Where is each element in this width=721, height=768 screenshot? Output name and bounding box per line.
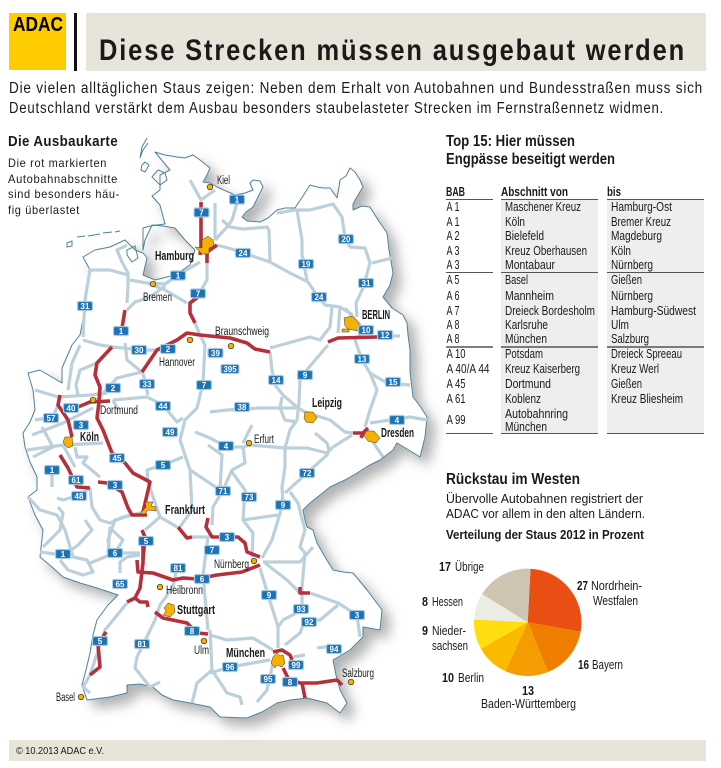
table: top 15 bottlenecks: Salzburg <box>611 331 649 346</box>
motorway number badges <box>44 195 404 687</box>
table: top 15 bottlenecks: Kreuz Bliesheim <box>611 391 683 406</box>
pie labels: Hessen <box>432 594 463 609</box>
motorway number badges: 12 <box>381 331 390 340</box>
motorway number badges: 31 <box>81 302 90 311</box>
table: top 15 bottlenecks: Potsdam <box>505 346 543 361</box>
motorway number badges: 10 <box>362 326 371 335</box>
pie labels: Berlin <box>458 670 484 685</box>
table: top 15 bottlenecks: bis <box>607 184 621 199</box>
motorway number badges: 4 <box>395 416 400 425</box>
pie labels: 16 <box>578 657 589 672</box>
table: top 15 bottlenecks: Montabaur <box>505 257 556 272</box>
motorway number badges: 7 <box>202 381 207 390</box>
table: top 15 bottlenecks: Mannheim <box>505 288 554 303</box>
motorway number badges: 3 <box>355 611 360 620</box>
table: top 15 bottlenecks: Ulm <box>611 317 629 332</box>
table: top 15 bottlenecks: Nürnberg <box>611 257 653 272</box>
motorway number badges: 39 <box>211 349 220 358</box>
table: top 15 bottlenecks: Maschener Kreuz <box>505 199 581 214</box>
motorway number badges: 1 <box>235 196 240 204</box>
table: top 15 bottlenecks: A 3 <box>446 257 460 272</box>
pie labels: 17 <box>439 559 451 574</box>
motorway number badges: 45 <box>113 454 122 463</box>
pie labels: Nieder- <box>432 623 466 638</box>
city labels: Nürnberg <box>214 559 249 571</box>
motorway number badges: 3 <box>79 421 84 430</box>
city labels: Leipzig <box>312 396 342 410</box>
motorway number badges: 20 <box>342 235 351 244</box>
map heading and description: fig überlastet <box>8 203 80 217</box>
intro text <box>9 80 703 117</box>
motorway number badges: 3 <box>113 481 118 490</box>
table: top 15 bottlenecks: A 61 <box>446 391 466 406</box>
city markers <box>78 184 354 700</box>
motorway number badges: 4 <box>224 442 229 451</box>
table: top 15 bottlenecks: Hamburg-Südwest <box>611 303 696 318</box>
table: top 15 bottlenecks: Hamburg-Ost <box>611 199 672 214</box>
motorway number badges: 73 <box>245 493 254 502</box>
table: top 15 bottlenecks: Karlsruhe <box>505 317 548 332</box>
table: top 15 bottlenecks: Bremer Kreuz <box>611 214 671 229</box>
table: top 15 bottlenecks: Autobahnring <box>505 406 568 421</box>
motorway number badges: 395 <box>223 365 237 374</box>
motorway number badges: 24 <box>315 293 324 302</box>
metropolitan areas <box>63 236 380 668</box>
table: top 15 bottlenecks: Nürnberg <box>611 288 653 303</box>
motorway number badges: 6 <box>113 549 118 558</box>
city labels: Bremen <box>143 292 172 304</box>
pie labels: Nordrhein- <box>591 578 642 593</box>
motorway number badges: 33 <box>143 380 152 389</box>
city labels: Basel <box>56 692 75 704</box>
table: top 15 bottlenecks: Köln <box>611 243 631 258</box>
motorway number badges: 2 <box>166 345 171 354</box>
heading and text: Rückstau im Westen: ADAC vor allem in den alten Ländern. <box>446 506 645 521</box>
motorway number badges: 9 <box>267 591 272 600</box>
city labels: Ulm <box>194 645 209 657</box>
city labels: München <box>226 646 265 660</box>
motorway number badges: 57 <box>47 414 56 423</box>
motorway number badges: 31 <box>362 279 371 288</box>
heading and text: Rückstau im Westen: Verteilung der Staus 2012 in Prozent <box>446 527 645 542</box>
islands <box>67 138 167 262</box>
motorway number badges: 72 <box>303 469 312 478</box>
table: top 15 bottlenecks: A 10 <box>446 346 466 361</box>
motorway number badges: 15 <box>389 378 398 387</box>
pie labels: Übrige <box>455 559 484 574</box>
table: top 15 bottlenecks: Kreuz Werl <box>611 361 659 376</box>
table: top 15 bottlenecks: A 3 <box>446 243 460 258</box>
table: top 15 bottlenecks: A 7 <box>446 303 460 318</box>
table: top 15 bottlenecks: A 45 <box>446 376 466 391</box>
motorway number badges: 49 <box>166 428 175 437</box>
map heading and description: Die Ausbaukarte <box>8 134 118 150</box>
table: top 15 bottlenecks: A 99 <box>446 412 466 427</box>
table: top 15 bottlenecks: A 2 <box>446 228 460 243</box>
motorway number badges: 7 <box>210 546 215 555</box>
city labels: Kiel <box>217 175 230 187</box>
motorway number badges: 5 <box>144 537 149 546</box>
header divider bar <box>74 13 77 71</box>
table: top 15 bottlenecks: Gießen <box>611 272 642 287</box>
pie labels: sachsen <box>432 638 468 653</box>
motorway number badges: 2 <box>111 384 116 393</box>
motorway number badges: 6 <box>200 575 205 584</box>
city labels: Köln <box>80 430 99 444</box>
table: top 15 bottlenecks: A 8 <box>446 317 460 332</box>
city labels: Hamburg <box>155 249 194 263</box>
motorway number badges: 92 <box>305 618 314 627</box>
motorway number badges: 96 <box>226 663 235 672</box>
pie labels: 27 <box>577 578 588 593</box>
map heading and description <box>8 134 120 217</box>
table: top 15 bottlenecks: Dreieck Bordesholm <box>505 303 595 318</box>
panel: Germany motorway map <box>23 138 427 718</box>
pie labels <box>422 559 642 711</box>
city labels: Dresden <box>381 426 414 440</box>
motorway number badges: 65 <box>116 580 125 589</box>
map heading and description: sind besonders häu- <box>8 187 120 201</box>
table: top 15 bottlenecks: Magdeburg <box>611 228 662 243</box>
motorway number badges: 1 <box>176 272 181 280</box>
motorway number badges: 8 <box>288 678 293 687</box>
table: top 15 bottlenecks <box>446 184 704 434</box>
city labels: Heilbronn <box>166 585 203 597</box>
city labels <box>56 175 414 704</box>
city labels: Braunschweig <box>215 326 269 338</box>
motorway number badges: 1 <box>50 466 55 475</box>
table: top 15 bottlenecks: München <box>505 331 547 346</box>
pie labels: 13 <box>522 683 534 698</box>
motorway number badges: 38 <box>238 403 247 412</box>
motorway number badges: 7 <box>199 208 204 218</box>
motorway number badges: 24 <box>239 249 248 258</box>
footer bar: © 10.2013 ADAC e.V. <box>16 745 104 757</box>
table: top 15 bottlenecks: Dreieck Spreeau <box>611 346 682 361</box>
motorway number badges: 48 <box>75 492 84 501</box>
city labels: Salzburg <box>342 668 374 680</box>
table: top 15 bottlenecks: A 40/A 44 <box>446 361 490 376</box>
table: top 15 bottlenecks: Köln <box>505 214 525 229</box>
motorway number badges: 14 <box>272 376 281 385</box>
pie labels: 9 <box>422 623 428 638</box>
table: top 15 bottlenecks: München <box>505 419 547 434</box>
city labels: Frankfurt <box>165 503 206 517</box>
city labels: Stuttgart <box>177 603 216 617</box>
motorway number badges: 61 <box>72 476 81 485</box>
motorway number badges: 3 <box>225 533 230 542</box>
heading and text: Rückstau im Westen <box>446 471 645 542</box>
table heading: Top 15: Hier müssen <box>446 133 575 150</box>
motorway number badges: 93 <box>297 605 306 614</box>
heading and text: Rückstau im Westen: Rückstau im Westen <box>446 471 580 488</box>
city labels: Dortmund <box>100 405 138 417</box>
pie chart: congestion by state <box>422 559 642 711</box>
heading and text: Rückstau im Westen: Übervolle Autobahnen registriert der <box>446 491 644 506</box>
pie labels: Westfalen <box>593 593 638 608</box>
table: top 15 bottlenecks: Gießen <box>611 376 642 391</box>
map heading and description: Die rot markierten <box>8 156 107 170</box>
pie labels: 10 <box>442 670 454 685</box>
city labels: BERLIN <box>362 308 390 322</box>
congested sections (red) <box>58 202 377 698</box>
table: top 15 bottlenecks: Basel <box>505 272 528 287</box>
motorway number badges: 95 <box>264 675 273 684</box>
table: top 15 bottlenecks: A 1 <box>446 214 460 229</box>
motorway number badges: 71 <box>219 487 228 496</box>
motorway number badges: 30 <box>135 346 144 355</box>
table: top 15 bottlenecks: Bielefeld <box>505 228 544 243</box>
header: ADAC logo <box>9 13 66 70</box>
motorway number badges: 81 <box>138 640 147 649</box>
motorway number badges: 8 <box>190 627 195 636</box>
title banner <box>86 13 706 71</box>
motorway number badges: 1 <box>119 327 124 336</box>
motorway number badges: 9 <box>303 371 308 380</box>
pie labels: Bayern <box>592 657 623 672</box>
city labels: Erfurt <box>254 434 275 446</box>
motorway number badges: 1 <box>61 550 66 559</box>
header: ADAC logo: ADAC <box>13 14 63 36</box>
map heading and description: Autobahnabschnitte <box>8 172 118 186</box>
motorway number badges: 7 <box>196 290 201 298</box>
table: top 15 bottlenecks: A 1 <box>446 199 460 214</box>
motorway number badges: 19 <box>302 260 311 269</box>
footer bar <box>9 740 706 761</box>
motorway number badges: 81 <box>174 564 183 573</box>
table: top 15 bottlenecks: Abschnitt von <box>501 184 568 199</box>
table: top 15 bottlenecks: Kreuz Oberhausen <box>505 243 587 258</box>
motorway number badges: 94 <box>330 645 339 654</box>
table: top 15 bottlenecks: Kreuz Kaiserberg <box>505 361 580 376</box>
table heading: Engpässe beseitigt werden <box>446 151 615 168</box>
table heading <box>446 133 615 168</box>
table: top 15 bottlenecks: A 5 <box>446 272 460 287</box>
land outline <box>23 152 427 718</box>
city labels: Hannover <box>159 357 195 369</box>
table: top 15 bottlenecks: BAB <box>446 184 465 199</box>
table: top 15 bottlenecks: Dortmund <box>505 376 551 391</box>
motorway number badges: 40 <box>67 404 76 413</box>
table: top 15 bottlenecks: A 6 <box>446 288 460 303</box>
table: top 15 bottlenecks: A 8 <box>446 331 460 346</box>
pie labels: Baden-Württemberg <box>481 696 576 711</box>
motorway network <box>27 180 427 705</box>
motorway number badges: 44 <box>159 402 168 411</box>
table: top 15 bottlenecks: Koblenz <box>505 391 541 406</box>
pie labels: 8 <box>422 594 428 609</box>
motorway number badges: 5 <box>98 637 103 646</box>
motorway number badges: 9 <box>281 501 286 510</box>
motorway number badges: 13 <box>358 355 367 364</box>
motorway number badges: 99 <box>292 661 301 670</box>
motorway number badges: 5 <box>161 461 166 470</box>
